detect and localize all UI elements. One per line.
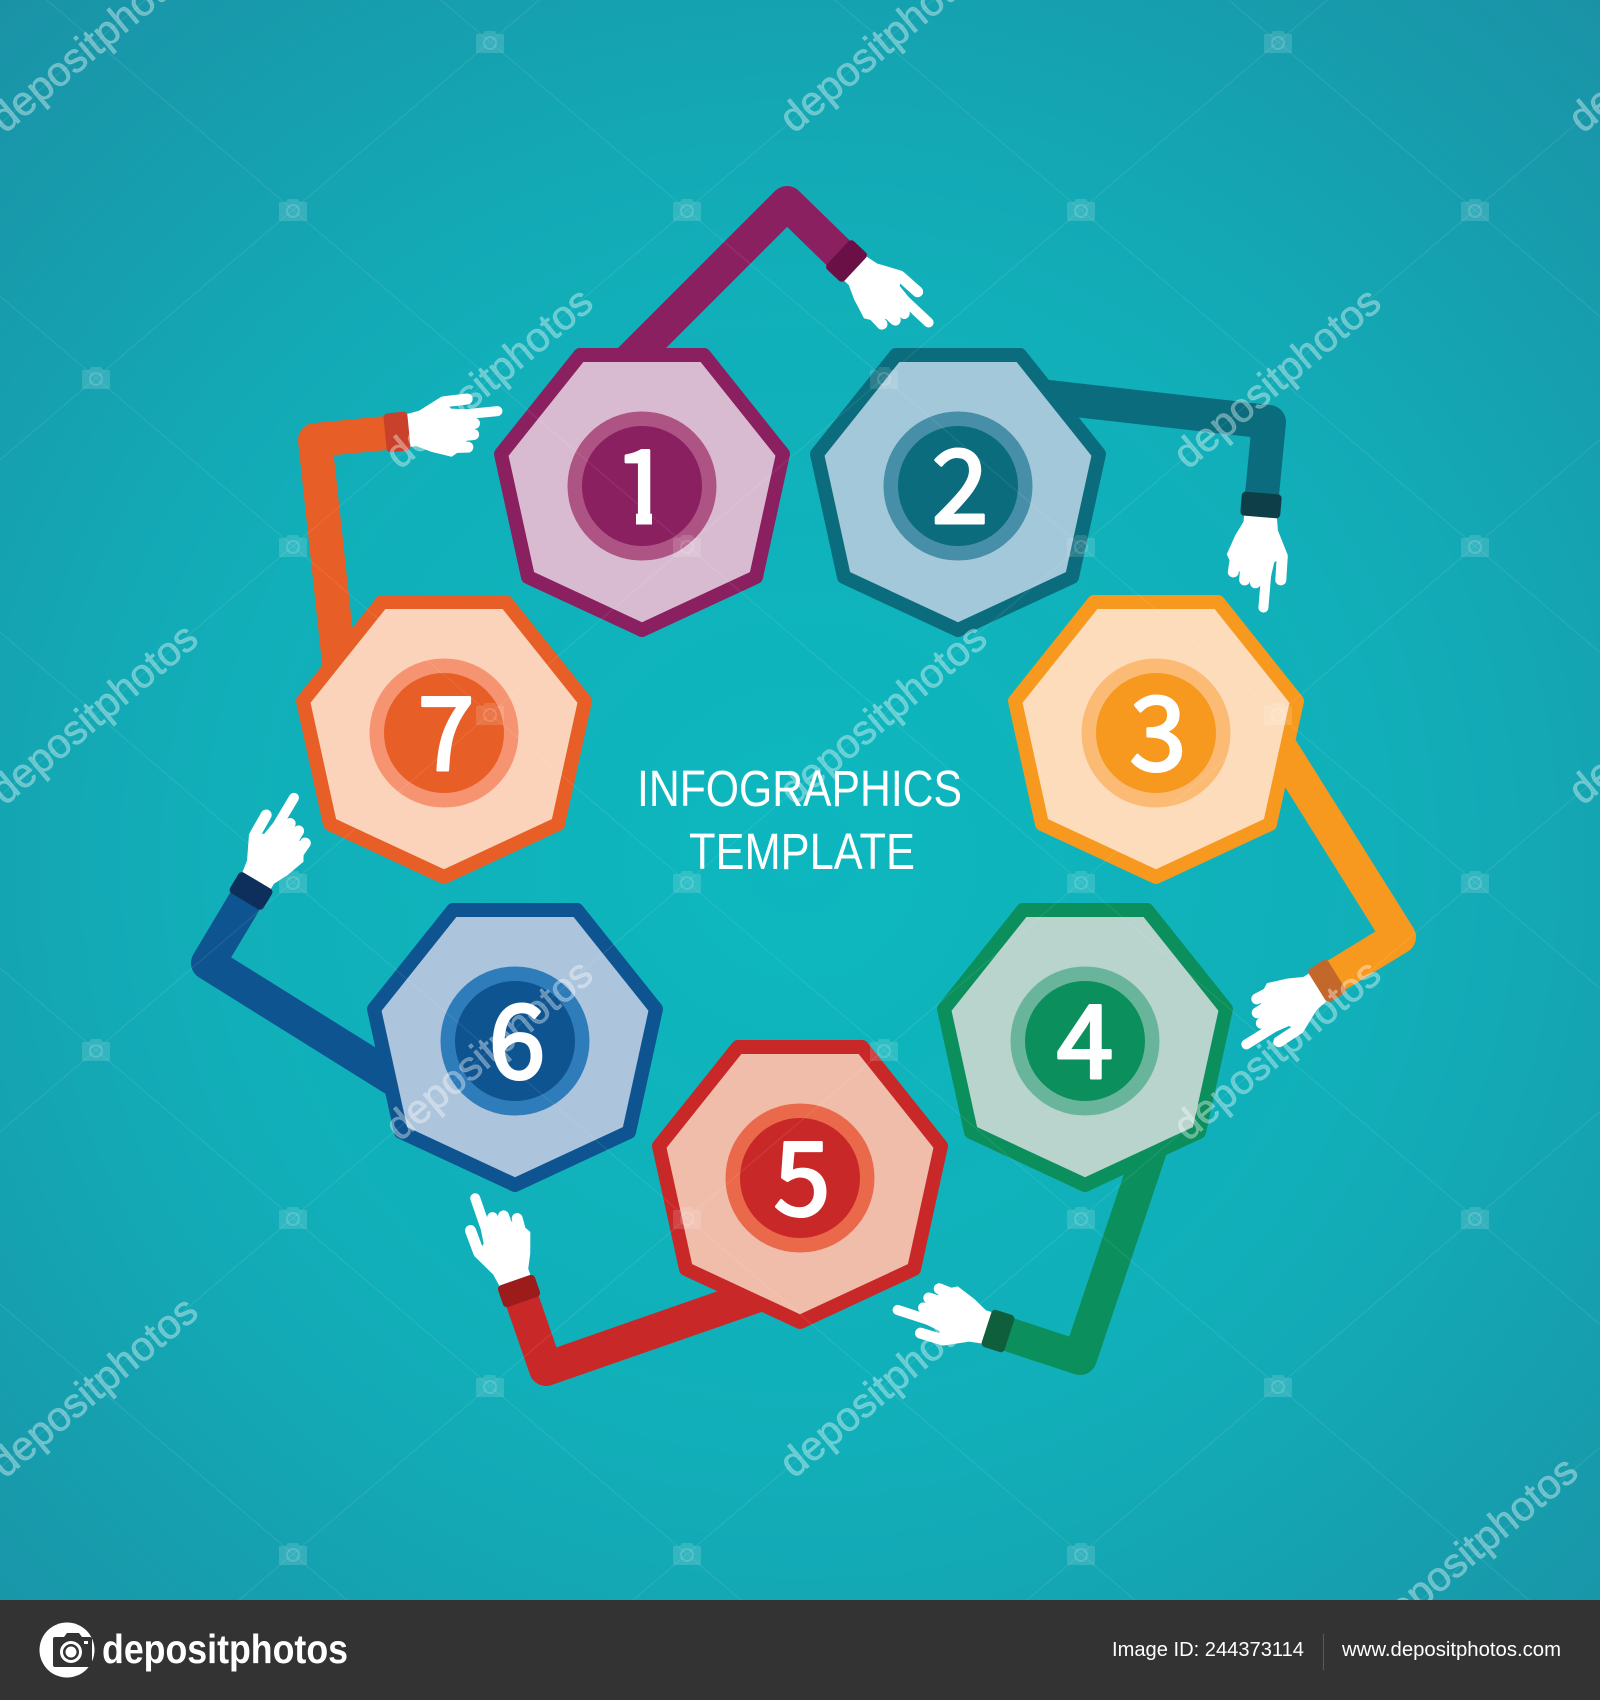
heptagon 1 <box>501 355 783 630</box>
watermark texts: depositphotos <box>1164 278 1389 477</box>
heptagon 5 <box>659 1047 941 1322</box>
title <box>637 760 962 880</box>
arm 4 pointing at step 5 <box>891 1150 1150 1364</box>
arm 7 pointing at step 1 <box>315 391 501 690</box>
heptagon 3 <box>1015 602 1297 877</box>
website: www.depositphotos.com <box>1341 1639 1561 1661</box>
watermark texts: depositphotos <box>376 950 601 1149</box>
watermark texts: depositphotos <box>1361 1447 1586 1646</box>
step 7: vermilion heptagon with arm <box>303 391 585 877</box>
arm 6 pointing at step 7 <box>208 788 410 1089</box>
heptagon 7 <box>303 602 585 877</box>
arm 1 pointing at step 2 <box>630 203 942 360</box>
watermark texts: depositphotos <box>770 614 995 813</box>
heptagon 4: 4 <box>1057 961 1113 1108</box>
heptagon 2 <box>817 355 1099 630</box>
title: INFOGRAPHICS <box>637 760 962 817</box>
arm 5 pointing at step 6 <box>456 1185 770 1369</box>
arm 2 pointing at step 3 <box>1040 396 1293 609</box>
footer logo: depositphotos <box>102 1626 348 1672</box>
step 3: orange heptagon with arm <box>1015 602 1399 1061</box>
footer logo <box>40 1622 348 1678</box>
step 1: purple heptagon with arm <box>501 203 942 630</box>
heptagon 1: 1 <box>614 406 670 553</box>
heptagon 6 <box>374 910 656 1185</box>
heptagon 3: 3 <box>1130 653 1186 800</box>
heptagon 2: 2 <box>932 406 988 553</box>
step 5: red heptagon with arm <box>456 1047 941 1369</box>
watermark texts: depositphotos <box>376 278 601 477</box>
footer bar <box>0 1600 1600 1700</box>
heptagon 4 <box>944 910 1226 1185</box>
heptagon 7: 7 <box>418 653 474 800</box>
arm 3 pointing at step 4 <box>1225 747 1399 1061</box>
watermark texts: depositphotos <box>1164 950 1389 1149</box>
watermark texts: depositphotos <box>770 1287 995 1486</box>
image id: Image ID: 244373114 <box>1112 1639 1304 1661</box>
watermark cameras <box>82 31 1489 1565</box>
heptagon 5: 5 <box>774 1098 830 1245</box>
step 4: green heptagon with arm <box>891 910 1226 1364</box>
title: TEMPLATE <box>689 823 915 880</box>
heptagon 6: 6 <box>489 961 545 1108</box>
step 2: teal heptagon with arm <box>817 355 1293 630</box>
step 6: blue heptagon with arm <box>208 788 656 1185</box>
